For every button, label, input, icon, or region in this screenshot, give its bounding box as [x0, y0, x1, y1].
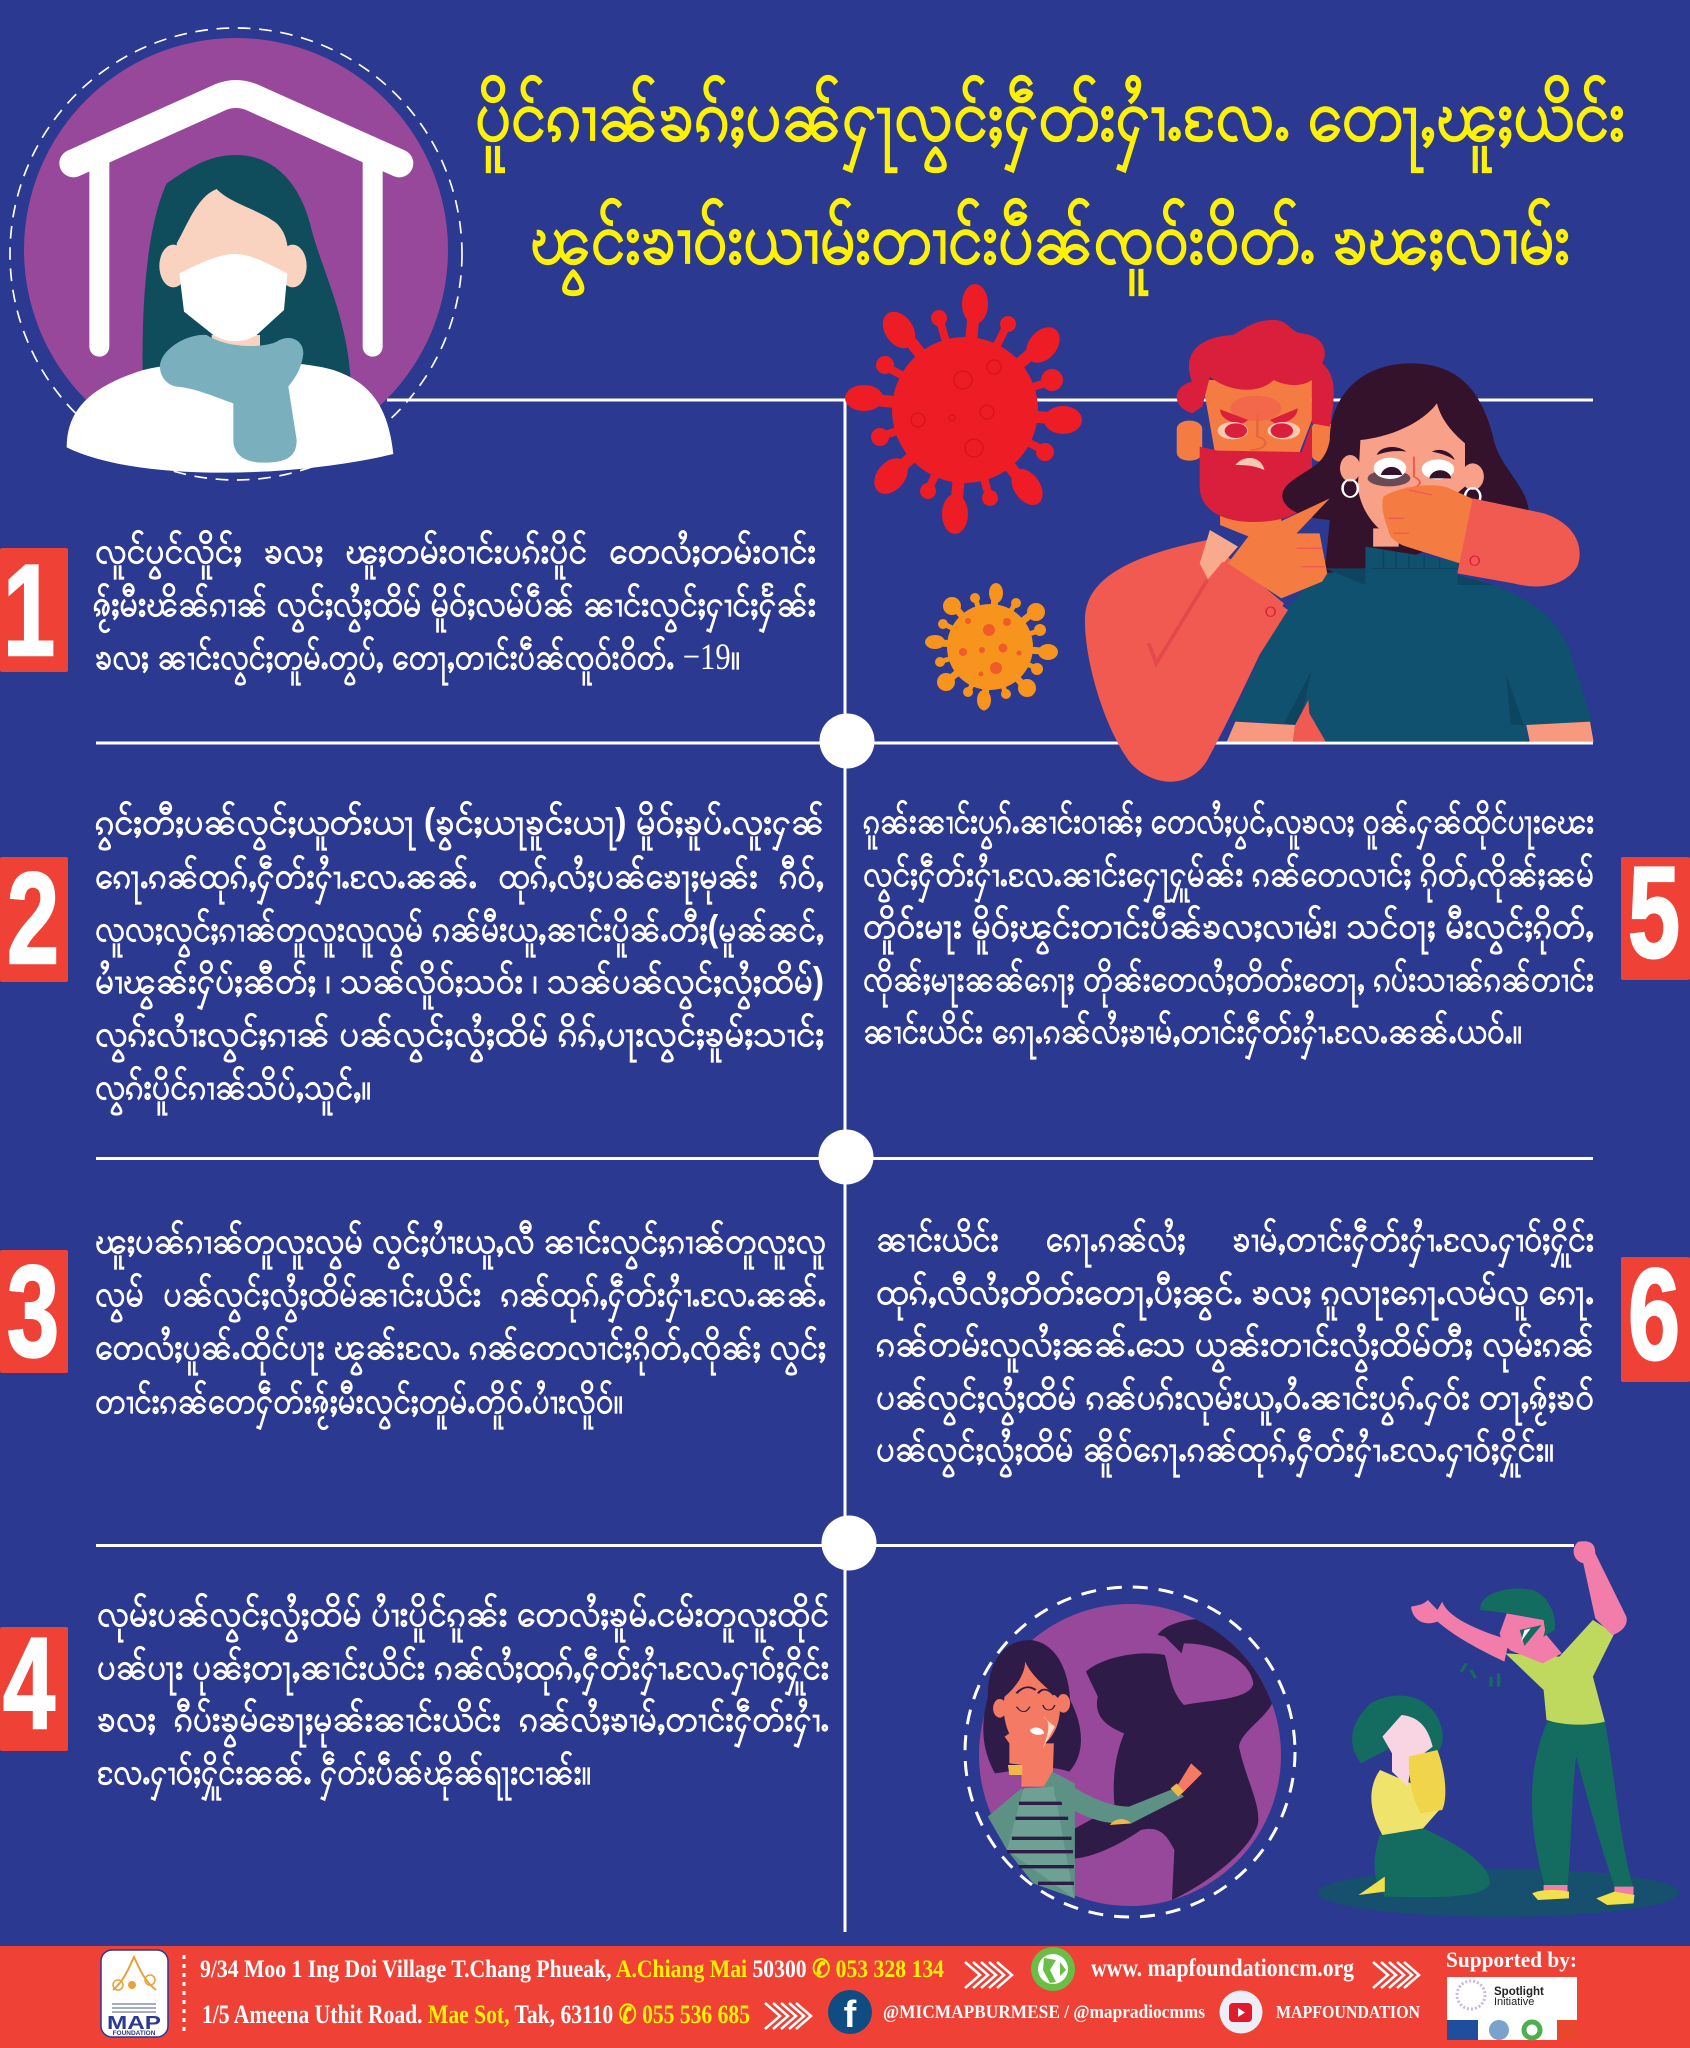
panel: point 5 [863, 798, 1690, 1061]
panel: point 1 [0, 528, 816, 687]
text block 3 [95, 1218, 826, 1431]
title [475, 75, 1625, 296]
number badge 3: 3 [7, 1239, 59, 1385]
address line 2: 1/5 Ameena Uthit Road. Mae Sot, Tak, 63110 ✆ 055 536 685 [202, 2000, 750, 2029]
logo: MAP Foundation: FOUNDATION [113, 2030, 156, 2037]
panel: point 6 [876, 1216, 1690, 1479]
number badge 6: 6 [1628, 1242, 1680, 1388]
text block 3: လွမ် ပၼ်လွင်ႈလွႆႈထိမ်ၼၢင်းယိင်း ၵၼ်ထုၵ်ႇႁဵတ်းႁၢႆႉလႄႉၼၼ်ႉ [95, 1271, 826, 1324]
text block 4: လုမ်းပၼ်လွင်ႈလွႆႈထိမ် ပႆၢးပိူင်ၵူၼ်း တေလႆႈၶူမ်ႉငမ်းတူလူးထိုင် [97, 1591, 829, 1644]
icon: facebook: f [844, 1994, 857, 2036]
icon: globe [1031, 1947, 1075, 1991]
arrow: chevrons 3 [765, 2003, 811, 2029]
icon: facebook [828, 1990, 872, 2036]
number badge 2: 2 [7, 846, 59, 992]
panel: point 4 [0, 1591, 829, 1802]
icon: youtube [1220, 1990, 1262, 2034]
text block 2: မႆၢၽွၼ်းႁိပ်ႈၼီတ်ႈ ၊ သၼ်လိူဝ်ႈသဝ်း ၊ သၼ်ပၼ်လွင်ႈလွႆႈထိမ်) [95, 958, 824, 1011]
icon: large red virus [845, 284, 1082, 534]
timeline node 2 [818, 1130, 874, 1184]
footer [0, 1946, 1690, 2048]
illustration: crying woman with shadow in circle [965, 1587, 1295, 1917]
text block 3: ၽူႈပၼ်ၵၢၼ်တူလူးလွမ် လွင်ႈပႆၢးယူႇလီ ၼၢင်းလွင်ႈၵၢၼ်တူလူးလူ [95, 1218, 826, 1271]
text block 5: တိူဝ်းမႃး မိူဝ်ႈၽွင်းတၢင်းပဵၼ်ၶလႈလၢမ်း၊ သင်ဝႃႈ မီးလွင်ႈၵိုတ်ႇ [863, 903, 1594, 956]
timeline node 1 [820, 714, 874, 768]
text block 6: ပၼ်လွင်ႈလွႆႈထိမ် ၼိူဝ်ၵေႃႉၵၼ်ထုၵ်ႇႁဵတ်းႁၢႆႉလႄႉႁၢဝ်ႈႁိူင်း။ [876, 1426, 1554, 1479]
text block 1: လူင်ပွင်လိူင်ႈ ၶလႈ ၽူႈတမ်းဝၢင်းပၵ်းပိူင် တေလႆႈတမ်းဝၢင်း [95, 528, 816, 581]
text block 2: လွၵ်းပိူင်ၵၢၼ်သိပ်ႇသူင်ႇ။ [95, 1064, 371, 1117]
logo: Spotlight Initiative [1447, 1977, 1577, 2040]
text block 4: ပၼ်ပႃး ပုၼ်ႈတႃႇၼၢင်းယိင်း ၵၼ်လႆႈထုၵ်ႇႁဵတ်းႁၢႆႉလႄႉႁၢဝ်ႈႁိူင်း [97, 1644, 829, 1697]
youtube handle: MAPFOUNDATION [1276, 2002, 1420, 2022]
panel: point 2 [0, 799, 824, 1117]
text block 4: လႄႉႁၢဝ်ႈႁိူင်းၼၼ်ႉ ႁဵတ်းပဵၼ်ၽိုၼ်ရႃးငၢၼ်း။ [97, 1749, 591, 1802]
arrow: chevrons 2 [1373, 1962, 1419, 1988]
icon: small orange virus [925, 583, 1058, 710]
text block 3: တၢင်းၵၼ်တေႁဵတ်းၷႂ်ႈမီးလွင်ႈတူမ်ႉတိူဝ်ႉပႆၢးလိူဝ်။ [95, 1378, 623, 1431]
text block 2: လွၵ်းလႆၢးလွင်ႈၵၢၼ် ပၼ်လွင်ႈလွႆႈထိမ် ၵိၵ်ႇပႃးလွင်ႈၶူမ်ႈသၢင်ႈ [95, 1011, 824, 1064]
illustration: shouting man and kneeling woman [1318, 1541, 1679, 1917]
website: www. mapfoundationcm.org [1091, 1955, 1354, 1982]
text block 2: လူလႈလွင်ႈၵၢၼ်တူလူးလူလွမ် ၵၼ်မီးယူႇၼၢင်းပိူၼ်ႉတီႈ(မူၼ်ၼင်ႇ [95, 906, 824, 959]
icon: masked woman in house [10, 28, 462, 480]
text block 4: ၶလႈ ၵီပ်းၶွမ်ၶေႃႈမုၼ်းၼၢင်းယိင်း ၵၼ်လႆႈၶၢမ်ႇတၢင်းႁဵတ်းႁၢႆႉ [97, 1696, 829, 1749]
text block 1: ၷႂ်ႈမီးၽိၼ်ၵၢၼ် လွင်ႈလွႆႈထိမ် မိူဝ်ႈလမ်ပဵၼ် ၼၢင်းလွင်ႈႁၢင်ႈႁႅၼ်း [93, 581, 816, 634]
timeline node 3 [822, 1516, 876, 1570]
logo: Spotlight Initiative: Spotlight [1494, 1986, 1544, 1998]
number badge 1: 1 [3, 538, 55, 684]
social handles: @MICMAPBURMESE / @mapradiocmms [883, 2002, 1205, 2023]
supported by: Supported by: [1446, 1947, 1577, 1972]
illustration: man assaulting woman [1085, 320, 1594, 782]
text block 2 [95, 799, 824, 1117]
text block 5 [863, 798, 1594, 1061]
text block 3: တေလႆႈပူၼ်ႉထိုင်ပႃး ၽွၼ်းလႄႉ ၵၼ်တေလၢင်ႈၵိုတ်ႇၸိုၼ်ႈ လွင်ႈ [95, 1324, 826, 1377]
text block 1: ၶလႈ ၼၢင်းလွင်ႈတူမ်ႉတွပ်ႇ တေႃႇတၢင်းပဵၼ်ၸူဝ်းဝိတ်ႉ −19။ [95, 634, 740, 687]
text block 6 [876, 1216, 1594, 1479]
panel: point 3 [0, 1218, 826, 1431]
text block 4 [97, 1591, 829, 1802]
number badge 5: 5 [1628, 840, 1680, 986]
text block 6: ၼၢင်းယိင်း ၵေႃႉၵၼ်လႆႈ ၶၢမ်ႇတၢင်းႁဵတ်းႁၢႆႉလႄႉႁၢဝ်ႈႁိူင်း [876, 1216, 1594, 1269]
arrow: chevrons 1 [965, 1962, 1012, 1988]
logo: MAP Foundation: MAP [107, 2013, 161, 2033]
text block 2: ၵွင်ႈတီႈပၼ်လွင်ႈယူတ်းယႃ (ၶွင်ႈယႃၶူင်းယႃ) မိူဝ်ႈၶူပ်ႉလူးႁၼ် [95, 799, 824, 852]
text block 6: ထုၵ်ႇလီလႆႈတိတ်းတေႃႇပီႈၼွင်ႉ ၶလႈ ၵူလႃးၵေႃႉလမ်လူ ၵေႃႉ [876, 1269, 1594, 1322]
text block 6: ပၼ်လွင်ႈလွႆႈထိမ် ၵၼ်ပၵ်းလုမ်းယူႇဝႆႉၼၢင်းပွၵ်ႉႁဝ်း တႃႇၷႂ်ႈၶဝ် [876, 1374, 1594, 1427]
logo: MAP Foundation [101, 1950, 168, 2037]
address line 1: 9/34 Moo 1 Ing Doi Village T.Chang Phueak, A.Chiang Mai 50300 ✆ 053 328 134 [200, 1956, 944, 1983]
number badge 4: 4 [3, 1611, 55, 1757]
logo: Spotlight Initiative: Initiative [1494, 1996, 1534, 2008]
text block 6: ၵၼ်တမ်းလူလႆႈၼၼ်ႉသေ ယွၼ်းတၢင်းလွႆႈထိမ်တီႈ လုမ်းၵၼ် [876, 1321, 1594, 1374]
text block 1 [93, 528, 816, 687]
text block 5: ၼၢင်းယိင်း ၵေႃႉၵၼ်လႆႈၶၢမ်ႇတၢင်းႁဵတ်းႁၢႆႉလႄႉၼၼ်ႉယဝ်ႉ။ [863, 1008, 1522, 1061]
text block 2: ၵေႃႉၵၼ်ထုၵ်ႇႁဵတ်းႁၢႆႉလႄႉၼၼ်ႉ ထုၵ်ႇလႆႈပၼ်ၶေႃႈမုၼ်း ၵီဝ်ႇ [95, 853, 824, 906]
